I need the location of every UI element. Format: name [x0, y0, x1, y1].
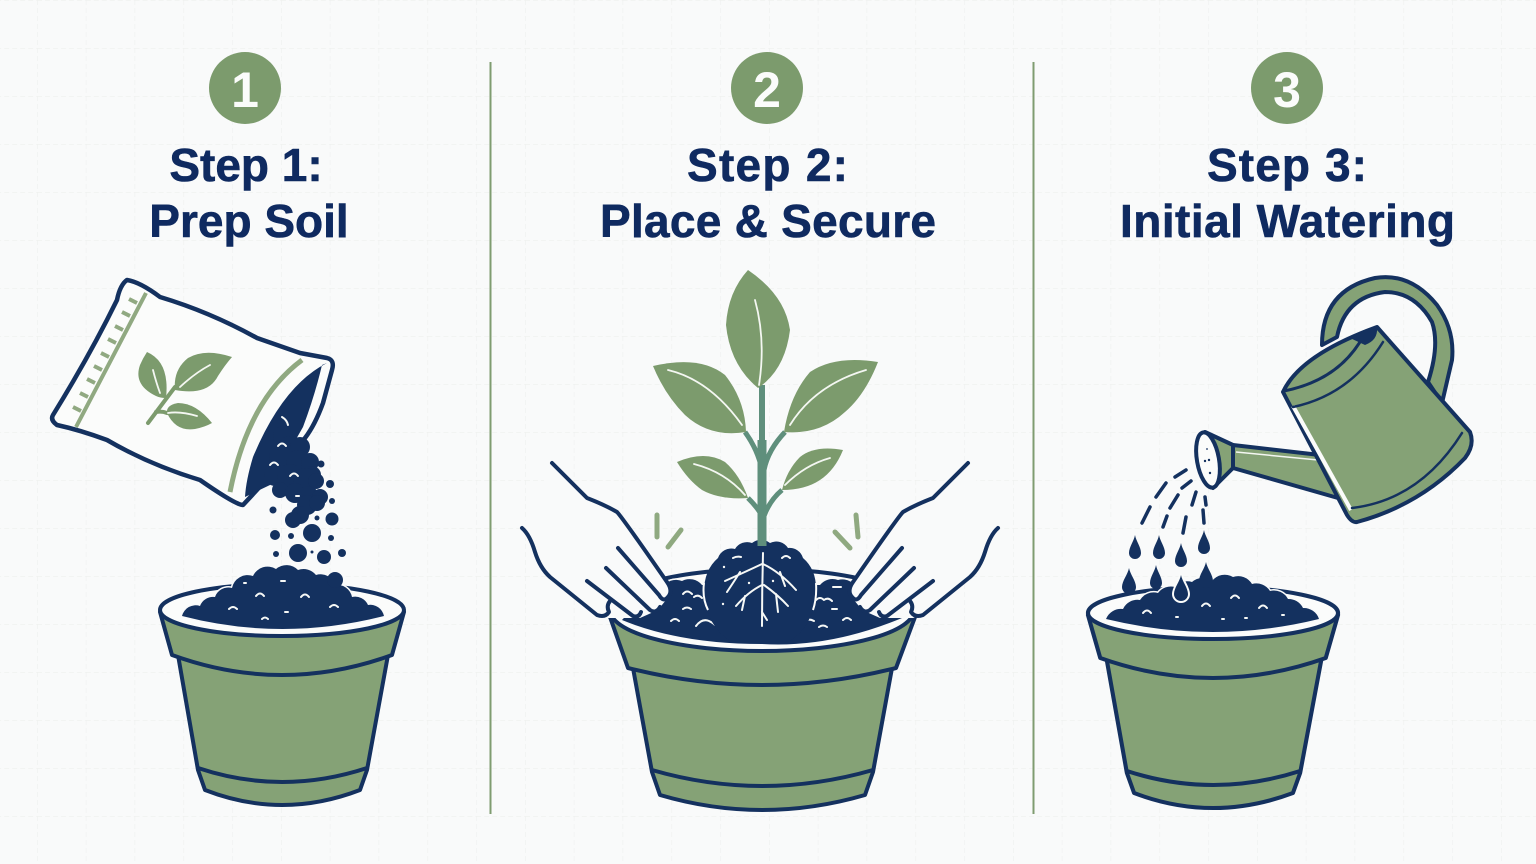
water streams and drops: [1122, 470, 1213, 601]
pot with soil: [1088, 575, 1338, 808]
bag lip stripe: [230, 360, 302, 492]
can body: [1283, 327, 1472, 522]
panel: step 3 initial watering: [1088, 52, 1472, 808]
number badge 2: 2: [753, 62, 781, 118]
heading: step 3: Step 3:: [1207, 139, 1367, 191]
left hand: [522, 463, 670, 618]
bag opening: [245, 363, 327, 497]
heading: step 2: Place & Secure: [600, 195, 936, 247]
right hand: [850, 463, 998, 618]
panel: step 1 prep soil: [52, 52, 404, 805]
panel: step 2 place and secure: [522, 52, 998, 810]
heading: step 3: Initial Watering: [1120, 195, 1455, 247]
number badge 1: 1: [231, 62, 259, 118]
root ball: [704, 540, 816, 641]
heading: step 1: Prep Soil: [149, 195, 349, 247]
bag leaf emblem: [138, 352, 232, 429]
divider between step 1 and step 2: [490, 62, 492, 814]
heading: step 2: Step 2:: [687, 139, 848, 191]
green motion ticks right: [835, 515, 858, 548]
soil bag: [52, 280, 333, 505]
seedling: [653, 270, 878, 547]
seedling leaves: [653, 270, 878, 498]
number badge 3: 3: [1273, 62, 1301, 118]
number badge 1: [209, 52, 281, 124]
pot with soil: [160, 565, 404, 805]
heading: step 1: Step 1:: [169, 139, 323, 191]
watering can: [1192, 277, 1472, 522]
large pot with soil: [610, 569, 915, 810]
green motion ticks left: [657, 515, 681, 547]
can handle: [1322, 277, 1452, 403]
can spout: [1233, 445, 1345, 500]
sprinkler rose: [1205, 432, 1233, 488]
number badge 2: [731, 52, 803, 124]
falling soil: [264, 417, 346, 564]
roots: [725, 553, 796, 626]
divider between step 2 and step 3: [1032, 62, 1034, 814]
number badge 3: [1251, 52, 1323, 124]
bag stitched seam: [73, 293, 146, 427]
